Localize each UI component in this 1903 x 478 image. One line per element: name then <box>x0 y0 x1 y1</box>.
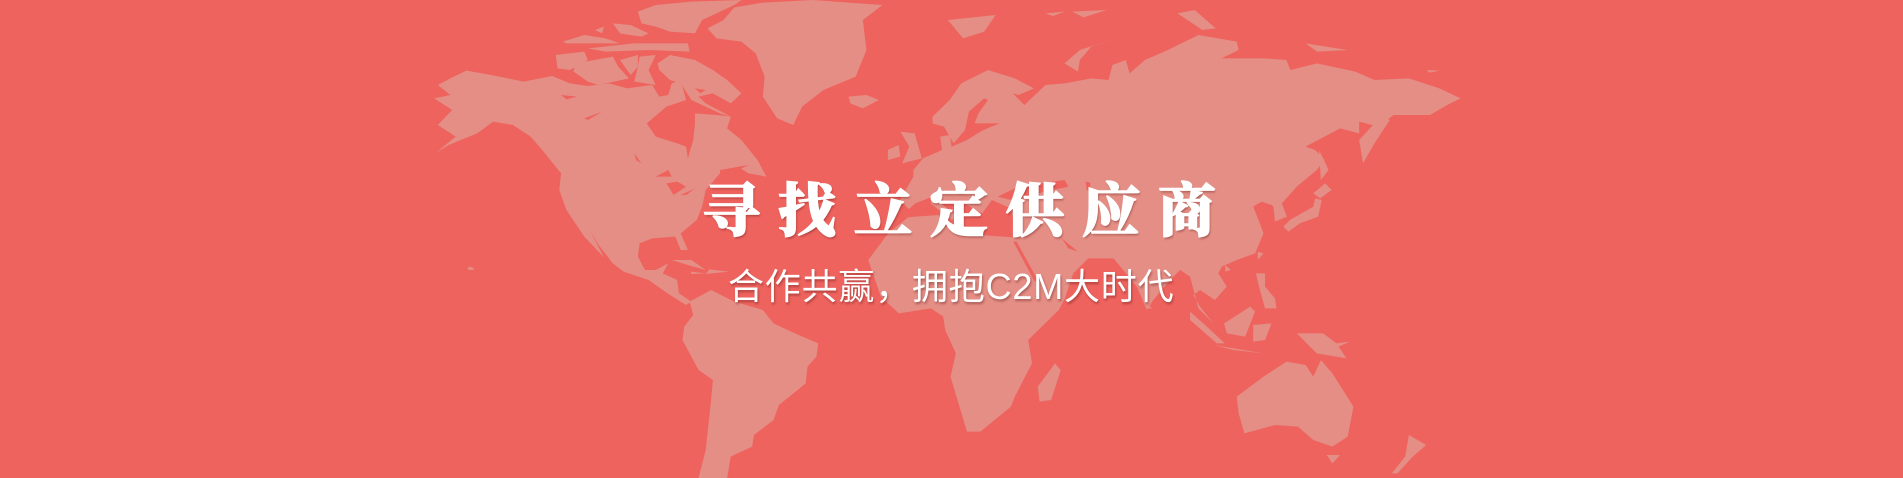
australia and new zealand <box>1237 360 1426 473</box>
italy <box>931 197 957 220</box>
arctic islands <box>556 0 741 117</box>
eurasia and africa <box>868 35 1461 432</box>
iceland, ireland and britain <box>849 95 922 163</box>
arctic russian islands <box>948 10 1440 73</box>
japan, sakhalin and kamchatka <box>1283 115 1390 232</box>
europe, asia, africa and oceania <box>868 10 1461 473</box>
lakes and bays <box>561 88 749 195</box>
inland seas <box>898 180 1091 282</box>
madagascar <box>1038 363 1061 402</box>
south america <box>682 290 818 478</box>
north america <box>434 71 766 305</box>
americas and greenland <box>434 0 922 478</box>
title: 寻找立定供应商 <box>702 179 1234 244</box>
greenland <box>707 0 882 125</box>
caribbean and pacific islands <box>468 260 729 274</box>
southeast asian islands <box>1145 252 1350 358</box>
subtitle: 合作共赢，拥抱C2M大时代 <box>728 266 1174 307</box>
